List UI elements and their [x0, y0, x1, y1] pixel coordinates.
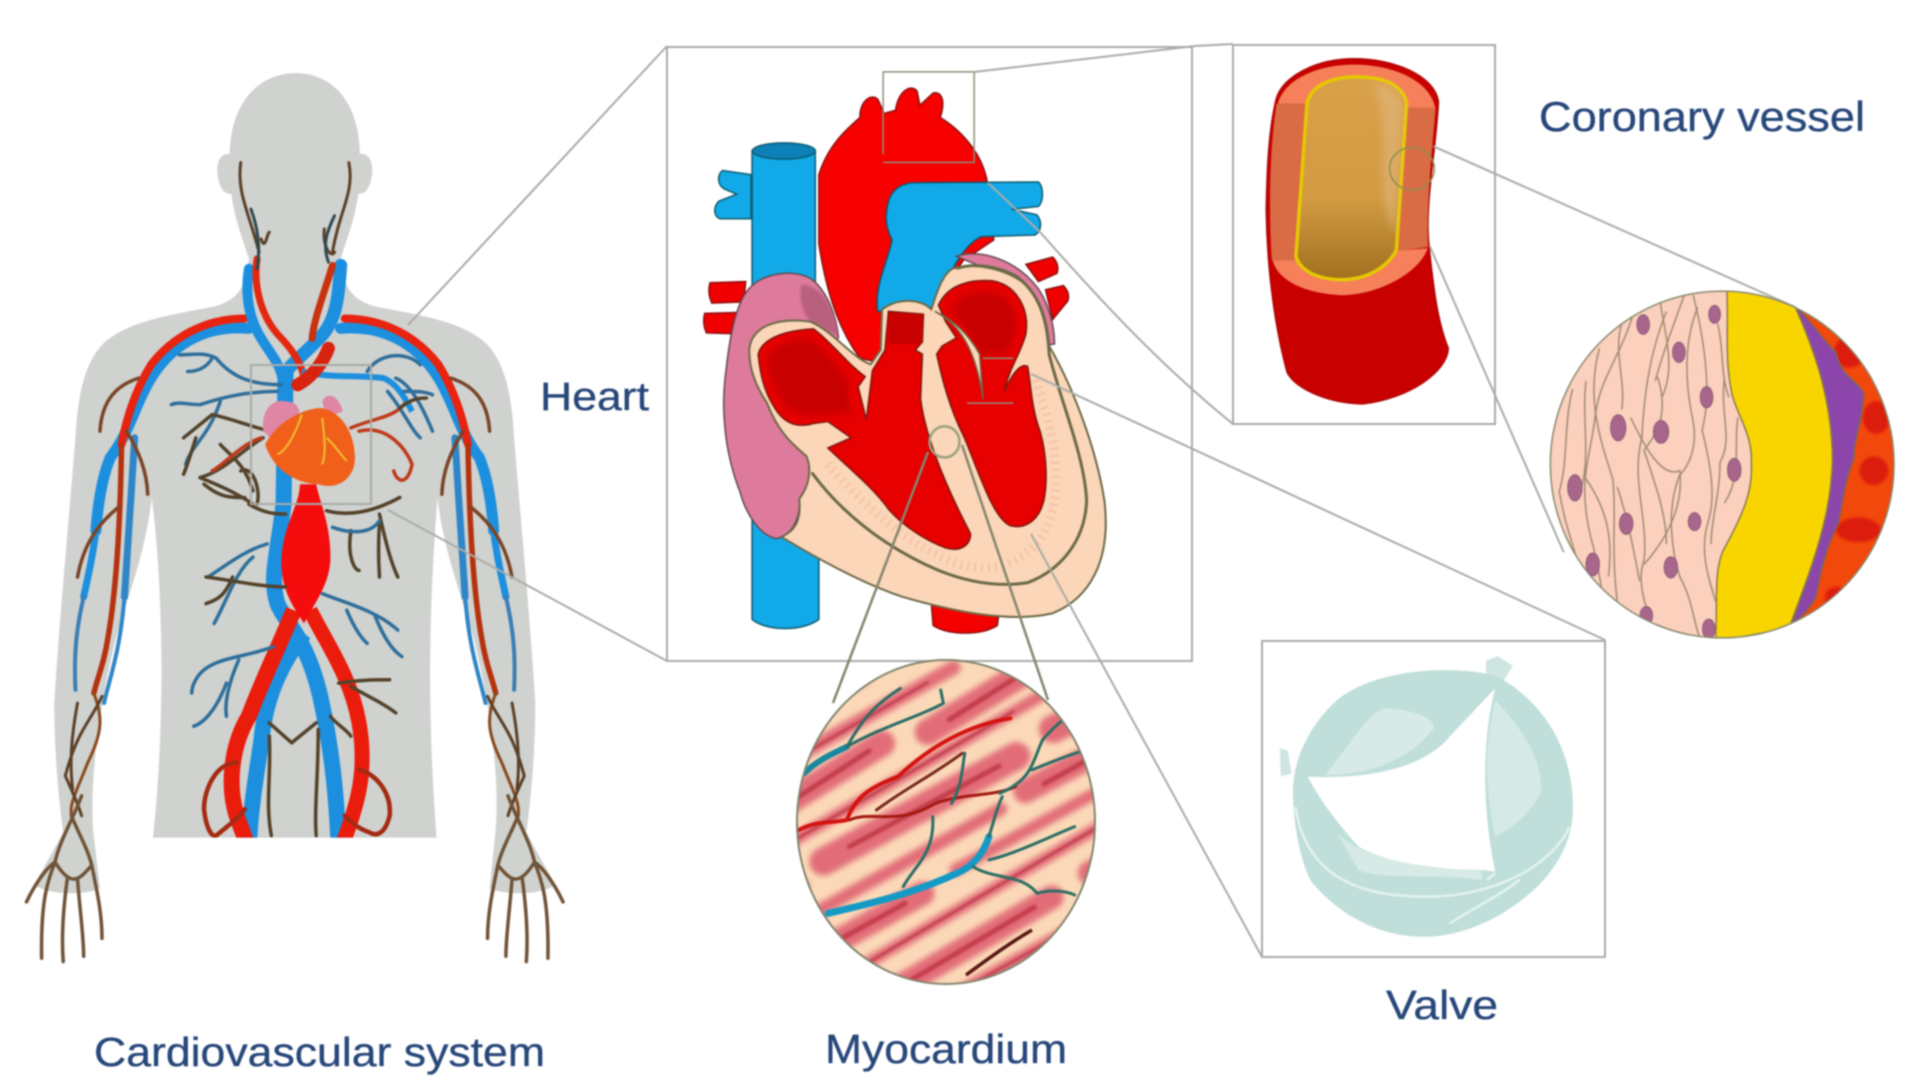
label: coronary vessel: Coronary vessel: [1539, 93, 1865, 140]
body selection box: [251, 365, 371, 504]
purple layer: [1791, 305, 1864, 626]
leaflet, right: [1487, 700, 1541, 837]
red blood blobs: [1825, 337, 1890, 607]
vena cava opening: [752, 143, 815, 159]
small heart: [263, 396, 355, 486]
valve tab, top: [1486, 656, 1513, 682]
aortic arch: [819, 88, 994, 362]
myocardium wall texture: [828, 375, 1056, 568]
superior vena cava: [752, 150, 815, 293]
pulmonary valve block: [888, 313, 922, 344]
atrium shadow: [800, 285, 838, 336]
superior vena cava branches: [715, 171, 751, 219]
neck and head vessels: [240, 163, 350, 385]
heart wall: [749, 266, 1106, 617]
connector: heart to myocardium, right: [962, 445, 1048, 700]
valve ring lines: [1295, 807, 1570, 923]
valve opening: [1308, 688, 1495, 872]
mitral valve leaflets: [935, 311, 983, 399]
cell outlines: [1559, 295, 1738, 638]
valve tab, left: [1280, 748, 1292, 777]
fiber stripes: [798, 660, 1095, 983]
arm and hand vessels, left: [27, 318, 249, 962]
magnified wall layers: [1546, 287, 1903, 646]
connector: vessel to wall, upper: [1433, 146, 1796, 307]
branching small vessels: [171, 354, 432, 836]
figure: heart cross-section: [704, 72, 1106, 633]
vessel bottom ring: [1273, 248, 1428, 295]
coronary vessel panel frame: [1233, 45, 1495, 424]
veins: [804, 688, 1080, 913]
label: valve: Valve: [1386, 982, 1498, 1028]
figure: coronary vessel cutaway: [1266, 59, 1449, 404]
outer wall line: [812, 266, 1087, 584]
leaflet, upper: [1326, 708, 1434, 775]
fiber background: [797, 660, 1095, 984]
left atrium wall: [956, 254, 1054, 346]
myocardium circle outline: [797, 660, 1095, 984]
right atrium: [724, 273, 838, 539]
left ventricle chamber: [937, 280, 1046, 527]
heart panel frame: [667, 47, 1192, 661]
vessel wall, right cut: [1398, 108, 1436, 251]
inferior vena cava: [752, 509, 819, 629]
aorta and iliac arteries: [232, 348, 362, 849]
arm and hand vessels, right: [341, 318, 563, 962]
vessel tube: [1266, 59, 1449, 404]
pulmonary veins: [704, 257, 1069, 334]
wall circle outline: [1550, 291, 1894, 638]
yellow layer: [1716, 287, 1832, 642]
connector: vessel to wall, lower: [1430, 246, 1564, 552]
leaflet, lower: [1337, 833, 1482, 880]
dark fiber cores: [798, 677, 1094, 980]
muscle fibers: [797, 660, 1095, 984]
descending aorta: [931, 603, 999, 633]
figure: human body with vessels: [27, 73, 563, 962]
sample circle: [1390, 148, 1434, 190]
connector: heart to myocardium, left: [833, 452, 928, 703]
connector: heart to coronary vessel, lower: [988, 183, 1233, 424]
connector: heart to coronary vessel, upper: [974, 44, 1233, 72]
label: heart: Heart: [540, 375, 649, 419]
outer red-orange layer: [1800, 312, 1894, 618]
arteries: [799, 718, 1016, 830]
zoom connector lines: [251, 45, 1605, 957]
connector: body to heart, upper: [408, 46, 667, 325]
dark lower vein: [966, 930, 1032, 975]
connector: body to heart, lower: [388, 510, 667, 661]
figure: vessel wall magnified: [1430, 146, 1903, 646]
body silhouette: [35, 73, 555, 893]
left atrium interior shade: [951, 292, 1016, 354]
label: cardiovascular system: Cardiovascular system: [94, 1029, 545, 1075]
figure: myocardium magnified: [795, 658, 1097, 986]
cell nuclei: [1568, 305, 1741, 639]
endothelium cells: [1550, 291, 1752, 638]
figure: heart valve: [1280, 656, 1573, 937]
vessel top ring: [1278, 65, 1435, 108]
connector: heart to valve, lower: [1031, 534, 1262, 957]
connectors from the heart to detail panels: [833, 44, 1605, 957]
heart zoom boxes and circle: [883, 72, 1013, 457]
lumen highlight: [1374, 83, 1403, 234]
central veins: [249, 372, 412, 849]
vessel wall, left cut: [1270, 103, 1308, 261]
vessel lumen: [1296, 77, 1407, 280]
label: myocardium: Myocardium: [825, 1026, 1067, 1072]
right atrium interior shade: [767, 339, 853, 416]
pulmonary artery: [877, 182, 1042, 311]
valve panel frame: [1262, 641, 1605, 957]
valve body: [1293, 670, 1573, 937]
right ventricle chamber: [758, 311, 971, 549]
connector: heart to valve, upper: [1031, 374, 1605, 640]
